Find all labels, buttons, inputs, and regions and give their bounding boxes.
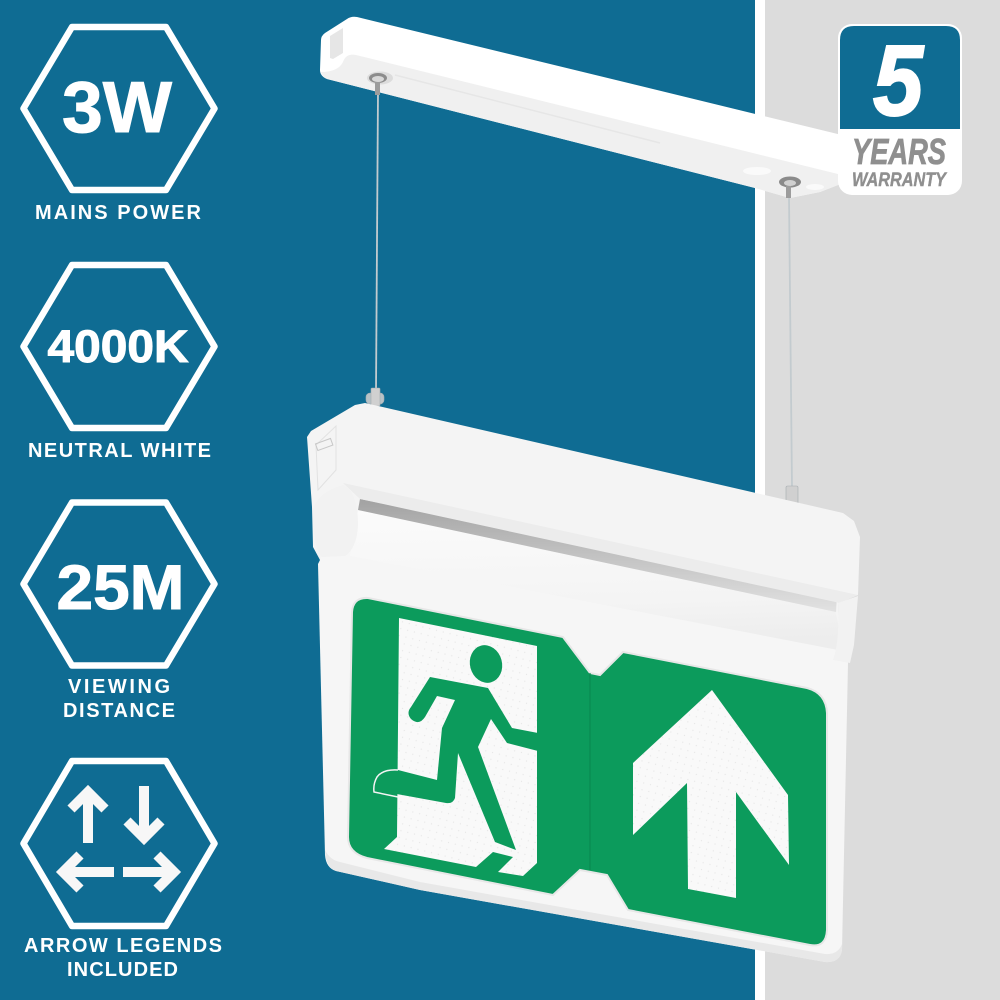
icon: rail screw right — [779, 176, 801, 198]
spec: arrow legends included: INCLUDED — [67, 959, 178, 981]
spec: 3W mains power: 3W — [62, 68, 172, 148]
warranty badge: YEARS — [852, 131, 946, 172]
spec: 4000K neutral white: 4000K — [48, 321, 189, 372]
spec: 3W mains power: MAINS POWER — [35, 202, 202, 224]
running man — [375, 642, 538, 850]
spec: 25M viewing distance: DISTANCE — [63, 700, 175, 722]
warranty badge: WARRANTY — [852, 170, 948, 191]
housing — [307, 403, 860, 650]
end cap — [313, 485, 358, 557]
up arrow — [633, 690, 789, 898]
spec: 25M viewing distance — [24, 502, 214, 722]
icon: four direction arrows — [63, 786, 174, 889]
warranty badge — [838, 24, 962, 195]
cable ferrules — [366, 388, 798, 506]
spec: 25M viewing distance: 25M — [56, 553, 184, 623]
background: white strip — [755, 0, 765, 1000]
spec: 3W mains power — [24, 27, 214, 224]
warranty badge: 5 — [873, 25, 924, 137]
spec: arrow legends included: ARROW LEGENDS — [24, 935, 222, 957]
hanging panel — [318, 548, 848, 962]
small clip detail — [316, 426, 336, 490]
green sign face — [348, 598, 827, 945]
spec: 25M viewing distance: VIEWING — [68, 676, 170, 698]
foot outline — [374, 770, 398, 797]
ceiling mounting rail — [320, 17, 850, 198]
icon: rail screw left — [367, 72, 393, 95]
spec: 4000K neutral white — [24, 265, 214, 462]
exit sign body — [307, 403, 860, 962]
spec: arrow legends included — [24, 761, 222, 981]
suspension wires — [376, 92, 792, 488]
right end cap — [833, 596, 858, 663]
background: blue panel — [0, 0, 755, 1000]
spec: 4000K neutral white: NEUTRAL WHITE — [28, 440, 211, 462]
door — [384, 618, 537, 876]
background: grey panel — [765, 0, 1000, 1000]
roller bar — [350, 510, 840, 650]
groove — [358, 499, 837, 612]
lip — [343, 483, 858, 603]
seam between panels — [589, 673, 591, 870]
